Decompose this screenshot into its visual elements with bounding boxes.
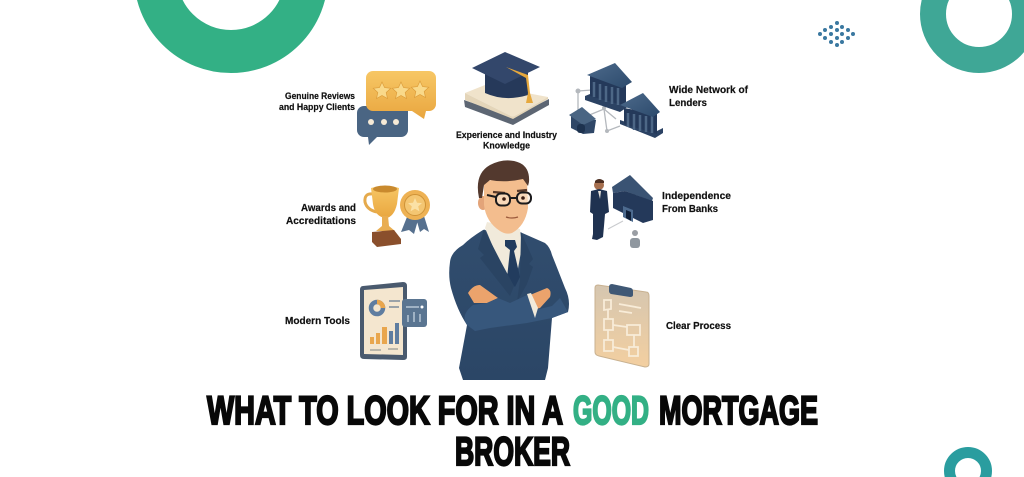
icon: graduation cap on book	[464, 52, 549, 125]
item: independence from banks	[590, 175, 731, 248]
decorative dot pattern	[818, 21, 855, 47]
item: genuine reviews	[279, 71, 436, 145]
title line 1 end: MORTGAGE	[659, 389, 818, 433]
label: independence: Independence	[662, 190, 731, 202]
shirt cuff	[527, 293, 538, 318]
decorative ring: bottom right	[950, 452, 986, 477]
icon: speech bubbles with stars	[357, 71, 436, 145]
decorative ring: top left	[156, 0, 306, 52]
right hand	[530, 288, 551, 310]
crossed forearms	[465, 295, 568, 331]
item: experience and industry knowledge	[456, 52, 558, 152]
glasses	[487, 192, 531, 206]
item: awards and accreditations	[286, 186, 430, 247]
icon: clipboard with flowchart	[595, 284, 649, 367]
hair	[478, 160, 529, 198]
icon: tablet with charts	[360, 282, 427, 360]
mouth	[506, 217, 518, 218]
ear	[478, 196, 488, 210]
left hand	[468, 285, 498, 303]
lapels	[478, 229, 533, 302]
label: independence: From Banks	[662, 203, 718, 215]
icon: network of banks	[569, 63, 663, 138]
label: genuine reviews: and Happy Clients	[279, 102, 355, 113]
title	[207, 389, 818, 474]
label: modern tools: Modern Tools	[285, 316, 350, 327]
tie	[505, 240, 520, 287]
highlighted word: GOOD	[573, 389, 649, 433]
eyes	[502, 197, 506, 201]
item: modern tools	[285, 282, 427, 360]
title line 1 start: WHAT TO LOOK FOR IN A	[207, 389, 563, 433]
suit body	[449, 230, 569, 380]
item: clear process	[595, 284, 731, 367]
icon: trophy and medal	[365, 186, 430, 247]
neck and shirt	[485, 222, 522, 280]
label: awards: Awards and	[301, 203, 356, 214]
label: wide network: Wide Network of	[669, 84, 748, 96]
eyebrows	[493, 190, 527, 193]
label: experience: Experience and Industry	[456, 130, 558, 141]
label: awards: Accreditations	[286, 216, 356, 227]
item: wide network of lenders	[569, 63, 748, 138]
face	[484, 177, 528, 234]
decorative ring: top right	[933, 0, 1024, 60]
label: experience: Knowledge	[483, 140, 530, 152]
icon: broker beside bank	[590, 175, 653, 248]
label: clear process: Clear Process	[666, 321, 731, 332]
title line 2: BROKER	[455, 430, 570, 474]
label: wide network: Lenders	[669, 97, 707, 109]
central figure: broker with crossed arms	[449, 160, 569, 380]
label: genuine reviews: Genuine Reviews	[285, 91, 355, 102]
